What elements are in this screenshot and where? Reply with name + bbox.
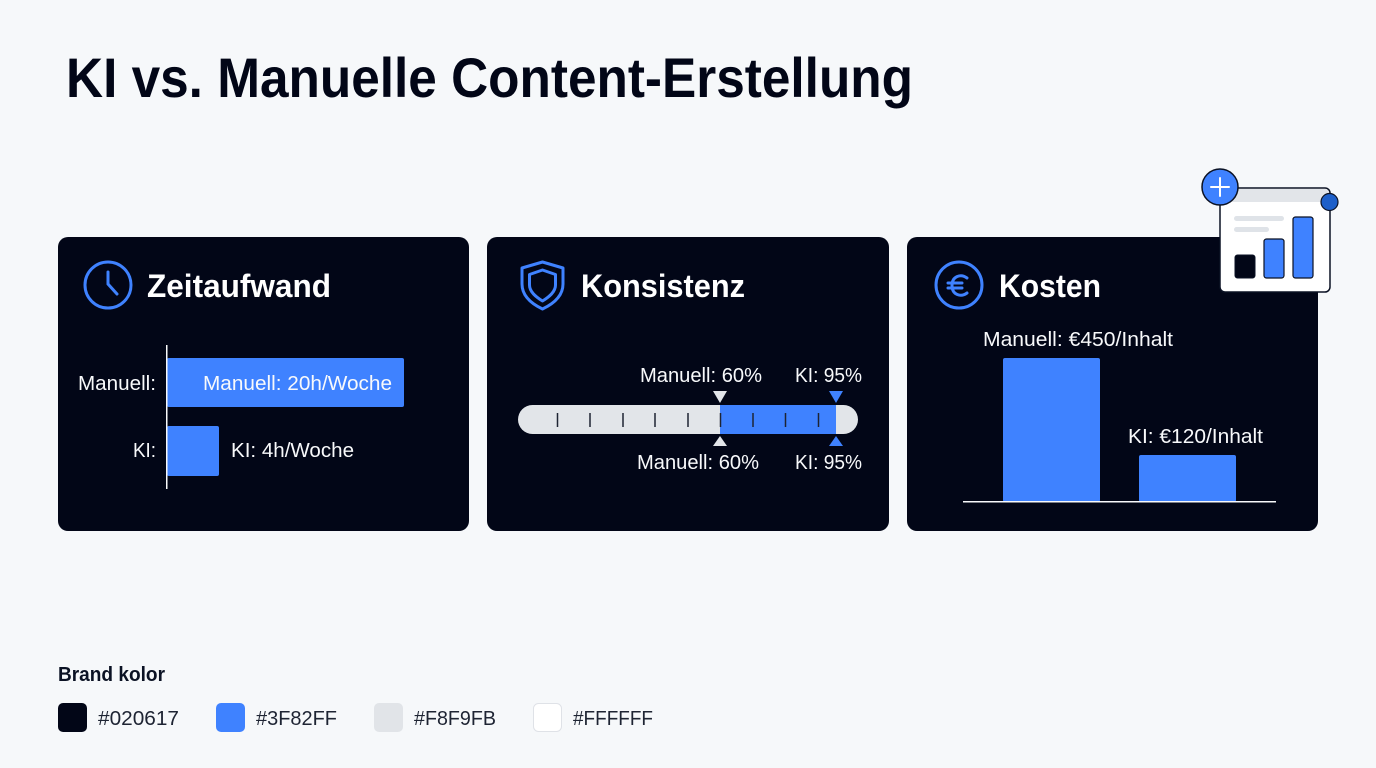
scale: consistency: Manuell: 60% bbox=[637, 452, 759, 474]
panel: Zeitaufwand bbox=[58, 237, 469, 531]
scale: consistency bbox=[518, 365, 862, 474]
icon: euro bbox=[936, 262, 982, 308]
bar chart: time: Manuell: bbox=[78, 373, 156, 395]
bar chart: time: Manuell: 20h/Woche bbox=[203, 373, 392, 395]
scale: consistency: KI: 95% bbox=[795, 452, 862, 474]
heading: Kosten: Kosten bbox=[999, 268, 1101, 304]
heading: Zeitaufwand: Zeitaufwand bbox=[147, 268, 331, 304]
legend: brand colours: #F8F9FB bbox=[414, 707, 496, 730]
title: KI vs. Manuelle Content-Erstellung bbox=[66, 46, 913, 109]
heading: Konsistenz: Konsistenz bbox=[581, 268, 745, 304]
panel: Konsistenz bbox=[487, 237, 889, 531]
scale: consistency: Manuell: 60% bbox=[640, 365, 762, 387]
legend: brand colours: #FFFFFF bbox=[573, 707, 653, 730]
icon: shield bbox=[522, 262, 563, 309]
legend: brand colours: Brand kolor bbox=[58, 664, 165, 686]
bar chart: time: KI: 4h/Woche bbox=[231, 440, 354, 462]
bar chart: cost: KI: €120/Inhalt bbox=[1128, 426, 1263, 448]
panel: Kosten bbox=[907, 237, 1318, 531]
icon: dashboard card bbox=[1202, 169, 1338, 292]
legend: brand colours: #020617 bbox=[98, 707, 179, 730]
legend: brand colours bbox=[58, 664, 653, 732]
bar chart: cost: Manuell: €450/Inhalt bbox=[983, 329, 1173, 351]
bar chart: time bbox=[78, 345, 404, 489]
bar chart: cost bbox=[963, 329, 1276, 502]
legend: brand colours: #3F82FF bbox=[256, 707, 337, 730]
scale: consistency: KI: 95% bbox=[795, 365, 862, 387]
icon: clock bbox=[85, 262, 131, 308]
bar chart: time: KI: bbox=[133, 440, 156, 462]
